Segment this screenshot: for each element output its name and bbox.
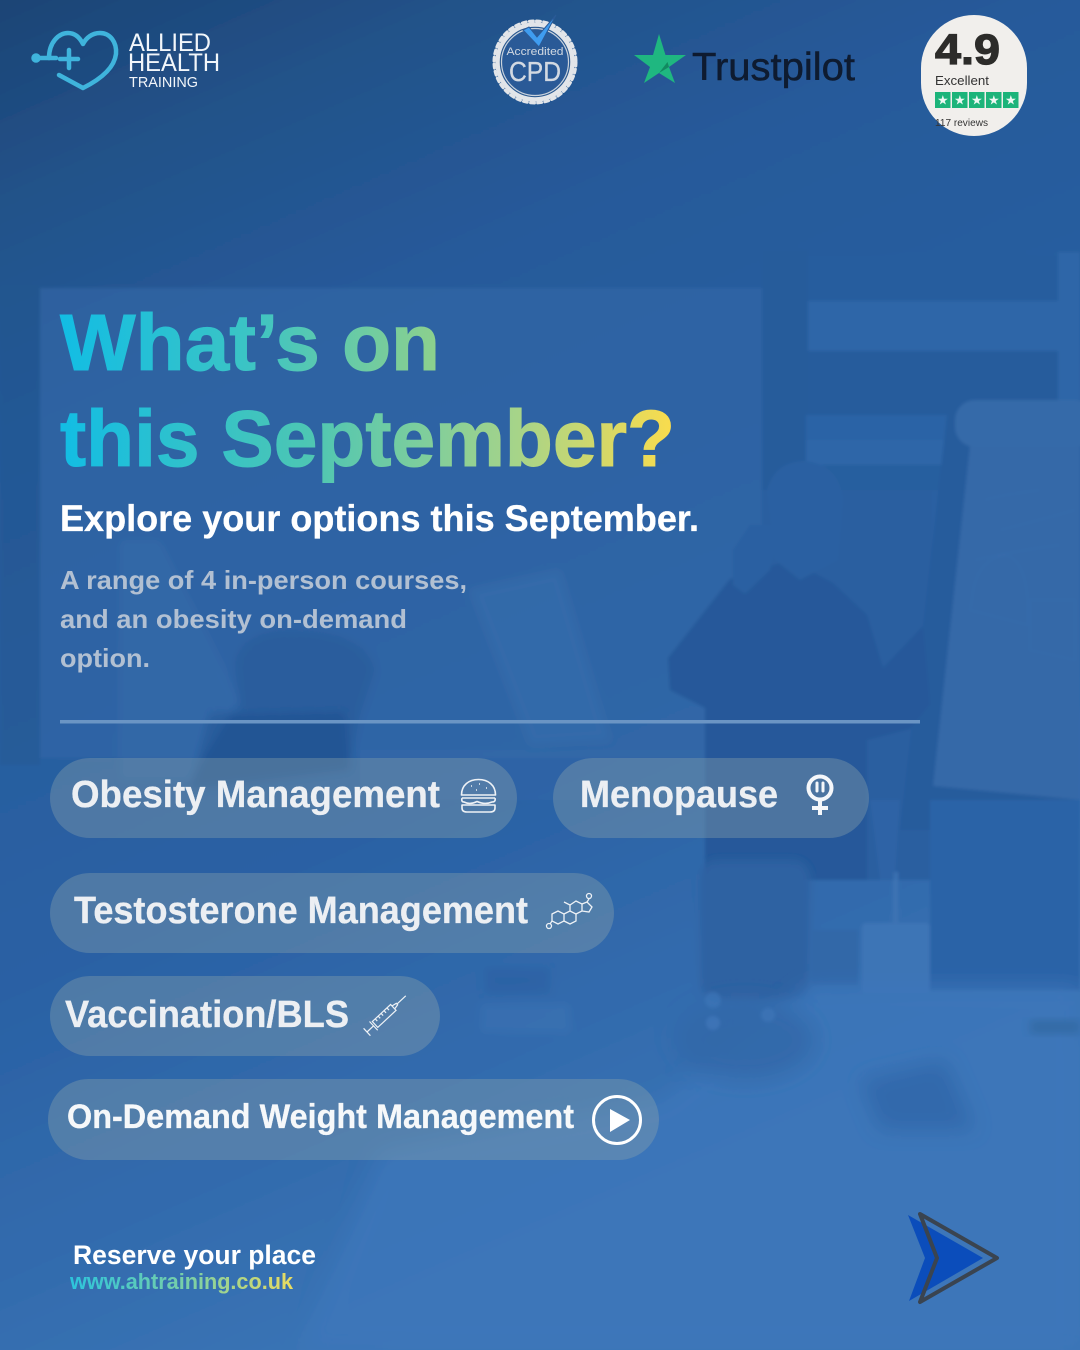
lower room: [930, 800, 1080, 990]
five green stars: [935, 92, 1018, 108]
description text: [60, 565, 467, 673]
pill: Menopause: [553, 758, 869, 838]
subheading: Explore your options this September.: [60, 498, 699, 539]
pill: Testosterone Management: Testosterone Management: [74, 890, 528, 932]
call to action: Reserve your place: [73, 1240, 316, 1270]
pill: Testosterone Management: [50, 873, 614, 953]
icon: green star: [634, 34, 686, 83]
rating badge: 4.9 Excellent: Excellent: [935, 74, 990, 88]
call to action: [69, 1240, 316, 1294]
badge: Accredited CPD: Accredited: [506, 46, 564, 58]
title: this September?: [60, 394, 675, 483]
whiteboard: [40, 288, 762, 758]
title: [60, 298, 675, 483]
badge: Accredited CPD: CPD: [509, 56, 561, 87]
pill: Obesity Management: [50, 758, 517, 838]
description text: option.: [60, 643, 150, 673]
icon: steroid molecule: [546, 894, 592, 928]
paper shapes on board: [470, 570, 610, 745]
pill: Vaccination/BLS: Vaccination/BLS: [65, 994, 349, 1036]
pill: On-Demand Weight Management: [48, 1079, 659, 1160]
logo wordmark: TRAINING: [129, 75, 198, 91]
logo: Allied Health Training: [34, 29, 220, 91]
flipchart: [900, 400, 1080, 830]
description text: A range of 4 in-person courses,: [60, 565, 467, 595]
five green stars: ★: [971, 94, 983, 108]
window panes: [808, 256, 1058, 301]
icon: play button: [594, 1096, 640, 1144]
badge: Accredited CPD: [494, 15, 576, 103]
icon: heart with cross: [34, 33, 116, 88]
rating badge: 4.9 Excellent: [921, 15, 1027, 136]
five green stars: ★: [1005, 94, 1017, 108]
logo wordmark: [128, 29, 220, 91]
icon: burger: [462, 780, 496, 812]
icon: syringe: [363, 991, 410, 1036]
logo wordmark: HEALTH: [128, 49, 220, 77]
arrow: next: [908, 1214, 997, 1302]
rating badge: 4.9 Excellent: 117 reviews: [935, 117, 988, 129]
icon: female symbol: [808, 776, 832, 815]
pill: Menopause: Menopause: [580, 774, 778, 816]
five green stars: ★: [937, 94, 949, 108]
title: What’s on: [60, 298, 440, 387]
standing presenter: [668, 560, 930, 880]
rating badge: 4.9 Excellent: 4.9: [935, 26, 1000, 74]
seated person: [200, 630, 375, 760]
logo: Trustpilot: [634, 34, 855, 89]
five green stars: ★: [954, 94, 966, 108]
pill: Obesity Management: Obesity Management: [71, 774, 440, 816]
pill: On-Demand Weight Management: On-Demand Weight Management: [67, 1098, 574, 1136]
column and wall: [762, 250, 808, 490]
description text: and an obesity on-demand: [60, 604, 407, 634]
logo: Trustpilot: Trustpilot: [692, 46, 855, 89]
five green stars: ★: [988, 94, 1000, 108]
call to action: www.ahtraining.co.uk: [69, 1269, 294, 1294]
logo wordmark: ALLIED: [129, 29, 211, 57]
pill: Vaccination/BLS: [50, 976, 440, 1056]
